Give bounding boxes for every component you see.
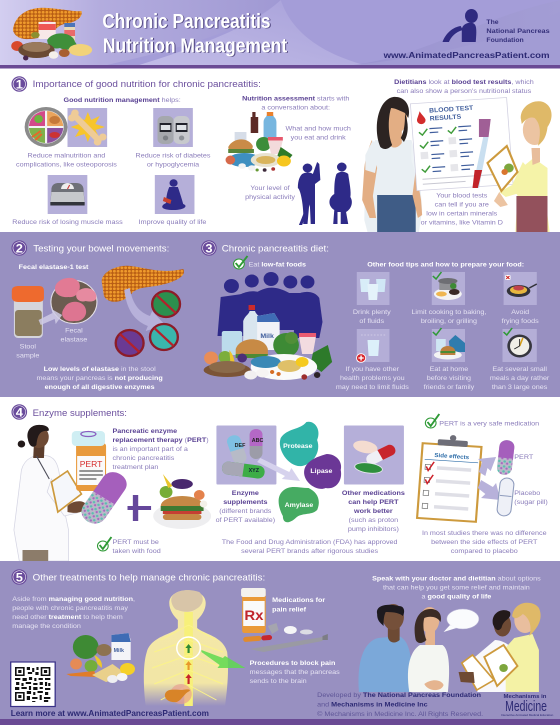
icon: capsule brands: DEF — [235, 443, 245, 449]
text: procedures to block pain: messages that the pancreas — [250, 669, 340, 676]
icon: glucose meters — [153, 108, 193, 147]
tip: cooking methods: broiling, or grilling — [421, 318, 477, 325]
icon: capsule brands: XYZ — [249, 468, 260, 474]
clinician dietitian — [484, 603, 541, 700]
text: dietitians intro: Dietitians look at blood test results, which — [394, 79, 534, 86]
tip: limit fluids: health problems you — [340, 375, 405, 382]
text: medications for pain relief: Medications for — [272, 597, 325, 604]
section 2 heading: Testing your bowel movements: — [33, 244, 169, 254]
panel: PERT safety — [417, 414, 548, 555]
icon: Rx bottle, pills and syringe — [241, 588, 328, 652]
text: physical activity: Your level of — [250, 185, 290, 192]
panel: middle band background — [0, 232, 560, 397]
tip: limit fluids: may need to limit fluids — [336, 384, 409, 391]
logo: National Pancreas Foundation: Foundation — [486, 37, 524, 44]
illustration: patient couple with clinicians — [358, 603, 541, 700]
text: PERT description: treatment plan — [112, 464, 158, 471]
title: Chronic Pancreatitis — [102, 11, 271, 33]
text: other medications: Other medications — [342, 490, 405, 497]
text: blood tests can tell: Your blood tests — [436, 193, 488, 199]
text: eat low-fat foods: Eat low-fat foods — [249, 262, 306, 268]
illustration: body nerve pathway — [144, 590, 228, 706]
band fade beneath people — [354, 692, 541, 719]
arrow: pancreas to enzymes — [124, 288, 165, 331]
text: enzyme supplements: (different brands — [219, 508, 272, 515]
logo: National Pancreas Foundation: National Pancreas — [486, 28, 550, 35]
text: procedures to block pain: sends to the brain — [250, 678, 307, 685]
section 4 heading — [11, 404, 127, 420]
text: dietitians intro: can also show a person's nutritional status — [397, 88, 532, 95]
text: other medications: work better — [353, 508, 393, 515]
text: developed by: and Mechanisms in Medicine Inc — [317, 702, 428, 708]
title: Nutrition Management — [103, 35, 287, 57]
text: blood tests can tell: or vitamins, like Vitamin D — [421, 220, 503, 226]
section 1 heading — [11, 76, 261, 92]
icon: stool sample jar — [12, 286, 44, 338]
panel: enzyme supplements brands — [216, 426, 300, 524]
icon: person sweeping silhouette — [298, 162, 320, 225]
logo: Mechanisms in Medicine: Mechanisms in — [504, 694, 547, 700]
text: other medications: pump inhibitors) — [348, 526, 399, 533]
text: blood tests can tell: can tell if you are — [435, 202, 489, 208]
icon: weight scale — [48, 175, 87, 214]
section 5 heading — [11, 569, 265, 585]
arrow: to placebo — [478, 480, 500, 500]
logo: Mechanisms in Medicine — [501, 694, 554, 717]
text: speak with doctor: that can help you get some relief and maintain — [383, 585, 530, 591]
section 5 heading: 5 — [16, 571, 23, 584]
icon: PERT bottle — [72, 431, 106, 491]
text: other medications: (such as proton — [349, 517, 398, 524]
logo: National Pancreas Foundation — [442, 9, 550, 44]
header banner — [0, 0, 560, 68]
text: muscle mass: Reduce risk of losing muscle mass — [12, 219, 123, 226]
tip: fluids: Drink plenty — [353, 309, 391, 316]
icon: protease enzyme — [280, 422, 319, 466]
text: learn more: Learn more at www.AnimatedPancreasPatient.com — [11, 708, 209, 718]
text: diabetes: Reduce risk of diabetes — [136, 153, 211, 159]
icon: amylase enzyme: Amylase — [285, 502, 313, 509]
speech bubble — [444, 609, 479, 632]
arrow: green to spine — [201, 650, 245, 668]
tip: eat at home: Eat at home — [430, 366, 468, 373]
panel: other food tips — [336, 262, 550, 391]
illustration: food group — [66, 633, 135, 683]
title: Chronic Pancreatitis — [103, 11, 272, 34]
text: PERT description: chronic pancreatitis — [112, 455, 175, 462]
document: blood test results: RESULTS — [430, 114, 462, 123]
text: eat and drink: you eat and drink — [291, 135, 346, 141]
text: low levels of elastase: means your pancreas is not producing — [36, 375, 163, 382]
section 4 heading: 4 — [16, 406, 23, 419]
text: physical activity: physical activity — [245, 194, 295, 201]
tip: small meals — [490, 328, 550, 391]
title — [102, 11, 288, 58]
icon: PERT capsule small — [496, 439, 515, 476]
panel: other medications — [342, 426, 405, 533]
icon: check safe — [425, 414, 439, 428]
text: PERT description: Pancreatic enzyme — [112, 428, 177, 435]
text: PERT description: is an important part of a — [112, 446, 188, 453]
tip: avoid frying: Avoid — [511, 309, 529, 316]
text: PERT with food: taken with food — [112, 548, 161, 555]
icon: divided food plate — [25, 107, 67, 147]
text: placebo label: (sugar pill) — [514, 499, 548, 506]
panel: nutrition assessment — [226, 96, 352, 225]
text: low levels of elastase: enough of all digestive enzymes — [45, 384, 155, 391]
icon: medicine pills — [352, 439, 397, 475]
icon: check with food note — [97, 537, 111, 551]
icon: person reading — [155, 175, 194, 214]
text: developed by: Developed by The National Pancreas Foundation — [317, 692, 481, 699]
clinician doctor — [459, 610, 516, 694]
illustration: food group: Milk — [114, 648, 124, 654]
panel: low-fat diet — [204, 256, 332, 380]
text: assessment intro: Nutrition assessment starts with — [242, 96, 349, 102]
icon: pancreas — [102, 266, 184, 302]
icon: Rx bottle, pills and syringe: Rx — [244, 608, 264, 624]
text: other treatment intro: manage the condition — [12, 623, 81, 630]
section 4 heading: Enzyme supplements: — [33, 408, 127, 419]
icon: elastase close-up circle — [51, 278, 97, 324]
text: eat and drink: What and how much — [286, 126, 351, 132]
tip: small meals: Eat several small — [492, 366, 547, 373]
arrow: capsules to enzymes — [257, 458, 300, 481]
icon: capsule brands: ABC — [252, 438, 264, 444]
text: malnutrition: Reduce malnutrition and — [28, 153, 105, 159]
icon: QR code — [11, 662, 55, 706]
tip: cooking methods — [411, 272, 486, 325]
arrow: jar to circle — [39, 309, 62, 325]
icon: check mark — [234, 256, 247, 269]
text: malnutrition: complications, like osteoporosis — [16, 162, 117, 168]
tip: fluids — [353, 272, 391, 325]
tip: small meals: than 3 large ones — [492, 384, 548, 391]
tip: eat at home: friends or family — [424, 384, 475, 391]
text: assessment intro: a conversation about: — [261, 105, 330, 111]
text: tips heading: Other food tips and how to prepare your food: — [367, 262, 524, 268]
illustration: family silhouettes — [217, 272, 322, 338]
tip: eat at home: before visiting — [427, 375, 471, 382]
icon: capsule brands — [221, 429, 266, 479]
text: blood tests can tell: low in certain minerals — [426, 211, 498, 217]
text: PERT with food: PERT must be — [112, 539, 159, 546]
section 3 heading: Chronic pancreatitis diet: — [222, 244, 329, 254]
icon: amylase enzyme — [279, 487, 319, 522]
text: speak with doctor: a good quality of life — [422, 594, 491, 600]
icon: PERT capsule — [77, 468, 131, 528]
text: FDA approval: several PERT brands after rigorous studies — [241, 548, 379, 555]
text: no difference: compared to placebo — [451, 548, 518, 555]
text: no difference: between the side effects of PERT — [431, 539, 538, 546]
panel: section 5 background — [0, 561, 560, 719]
illustration: healthy food pile: Milk — [260, 333, 274, 340]
text: procedures to block pain: Procedures to block pain — [250, 660, 335, 667]
text: placebo label: Placebo — [514, 490, 540, 497]
text: helps intro: Good nutrition management helps: — [64, 97, 181, 104]
text: speak with doctor: Speak with your doctor and dietitian about options — [372, 576, 541, 582]
icon: bone fracture — [67, 108, 107, 147]
illustration: woman patient — [362, 97, 422, 232]
document: blood test results — [410, 98, 513, 191]
text: stool sample: sample — [16, 353, 40, 359]
document: side effects clipboard — [417, 433, 482, 522]
icon: PERT bottle: PERT — [80, 459, 102, 469]
man — [358, 604, 412, 692]
icon: plus — [127, 495, 151, 521]
text: stool sample: Stool — [20, 344, 36, 350]
tip: avoid frying: frying foods — [502, 318, 539, 325]
section 2 heading: 2 — [16, 242, 23, 255]
document: blood test results: BLOOD TEST — [429, 105, 473, 115]
icon: no teal enzyme — [150, 324, 178, 350]
text: fecal elastase label: elastase — [61, 337, 87, 343]
text: enzyme supplements: supplements — [223, 499, 268, 506]
icon: no purple enzyme — [116, 330, 144, 356]
footer bar — [0, 719, 560, 725]
tip: avoid frying — [502, 272, 539, 325]
tip: cooking methods: Limit cooking to baking, — [411, 309, 486, 316]
text: quality of life: Improve quality of life — [139, 219, 207, 226]
tip: small meals: meals a day rather — [490, 375, 550, 382]
text: test name: Fecal elastase-1 test — [19, 264, 89, 271]
text: other medications: can help PERT — [348, 499, 399, 506]
text: diabetes: or hypoglycemia — [147, 162, 199, 168]
icon: food and drink pile — [226, 112, 292, 172]
tip: fluids: of fluids — [359, 318, 385, 325]
icon: protease enzyme: Protease — [283, 443, 313, 450]
section 2 heading — [11, 240, 169, 256]
icon: placebo capsule — [496, 477, 515, 517]
icon: lipase enzyme — [304, 454, 341, 489]
section 3 heading: 3 — [205, 242, 213, 255]
section 1 heading: 1 — [16, 78, 23, 91]
panel: dietitians and blood tests — [362, 79, 552, 232]
icon: lipase enzyme: Lipase — [310, 468, 333, 475]
text: other treatment intro: people with chronic pancreatitis may — [12, 605, 128, 612]
illustration: doctor with clipboard — [14, 425, 86, 561]
section 1 heading: Importance of good nutrition for chronic pancreatitis: — [33, 79, 261, 90]
title: Nutrition Management — [104, 36, 288, 58]
logo: Mechanisms in Medicine: Interactive Animated Medical Education — [501, 713, 554, 717]
tip: limit fluids: If you have other — [346, 366, 400, 373]
logo: National Pancreas Foundation: The — [486, 19, 499, 26]
document: side effects clipboard: Side effects — [434, 453, 470, 461]
tip: eat at home — [424, 328, 475, 391]
text: FDA approval: The Food and Drug Administration (FDA) has approved — [222, 539, 398, 546]
text: fecal elastase label: Fecal — [65, 328, 83, 334]
section 5 heading: Other treatments to help manage chronic pancreatitis: — [33, 573, 265, 583]
text: developed by: © Mechanisms in Medicine Inc. All Rights Reserved. — [317, 710, 483, 718]
tip: limit fluids — [336, 329, 409, 391]
woman — [408, 607, 449, 692]
text: PERT description: replacement therapy (PERT) — [112, 437, 209, 444]
text: no difference: In most studies there was no difference — [422, 530, 547, 537]
text: medications for pain relief: pain relief — [272, 607, 307, 613]
text: other treatment intro: Aside from managing good nutrition, — [12, 596, 135, 603]
text: very safe: PERT is a very safe medication — [439, 421, 539, 427]
illustration: meal with burger and fruit — [153, 474, 211, 529]
section 3 heading — [201, 240, 329, 256]
icon: blood sample tube — [472, 119, 491, 188]
website url: www.AnimatedPancreasPatient.com — [382, 50, 550, 60]
panel: good nutrition management — [12, 97, 211, 226]
text: enzyme supplements: Enzyme — [232, 490, 259, 497]
illustration: dietitian with clipboard — [487, 101, 552, 232]
text: PERT label: PERT — [514, 454, 534, 461]
panel: fecal elastase test — [12, 264, 184, 391]
text: low levels of elastase: Low levels of elastase in the stool — [44, 366, 156, 373]
icon: header food and pancreas collage — [11, 8, 92, 61]
text: other treatment intro: need other treatment to help them — [12, 614, 123, 621]
icon: no green enzyme — [152, 291, 180, 317]
text: enzyme supplements: of PERT available) — [216, 517, 275, 524]
icon: person with guitar silhouette — [329, 162, 352, 224]
arrow: to PERT — [478, 457, 496, 476]
